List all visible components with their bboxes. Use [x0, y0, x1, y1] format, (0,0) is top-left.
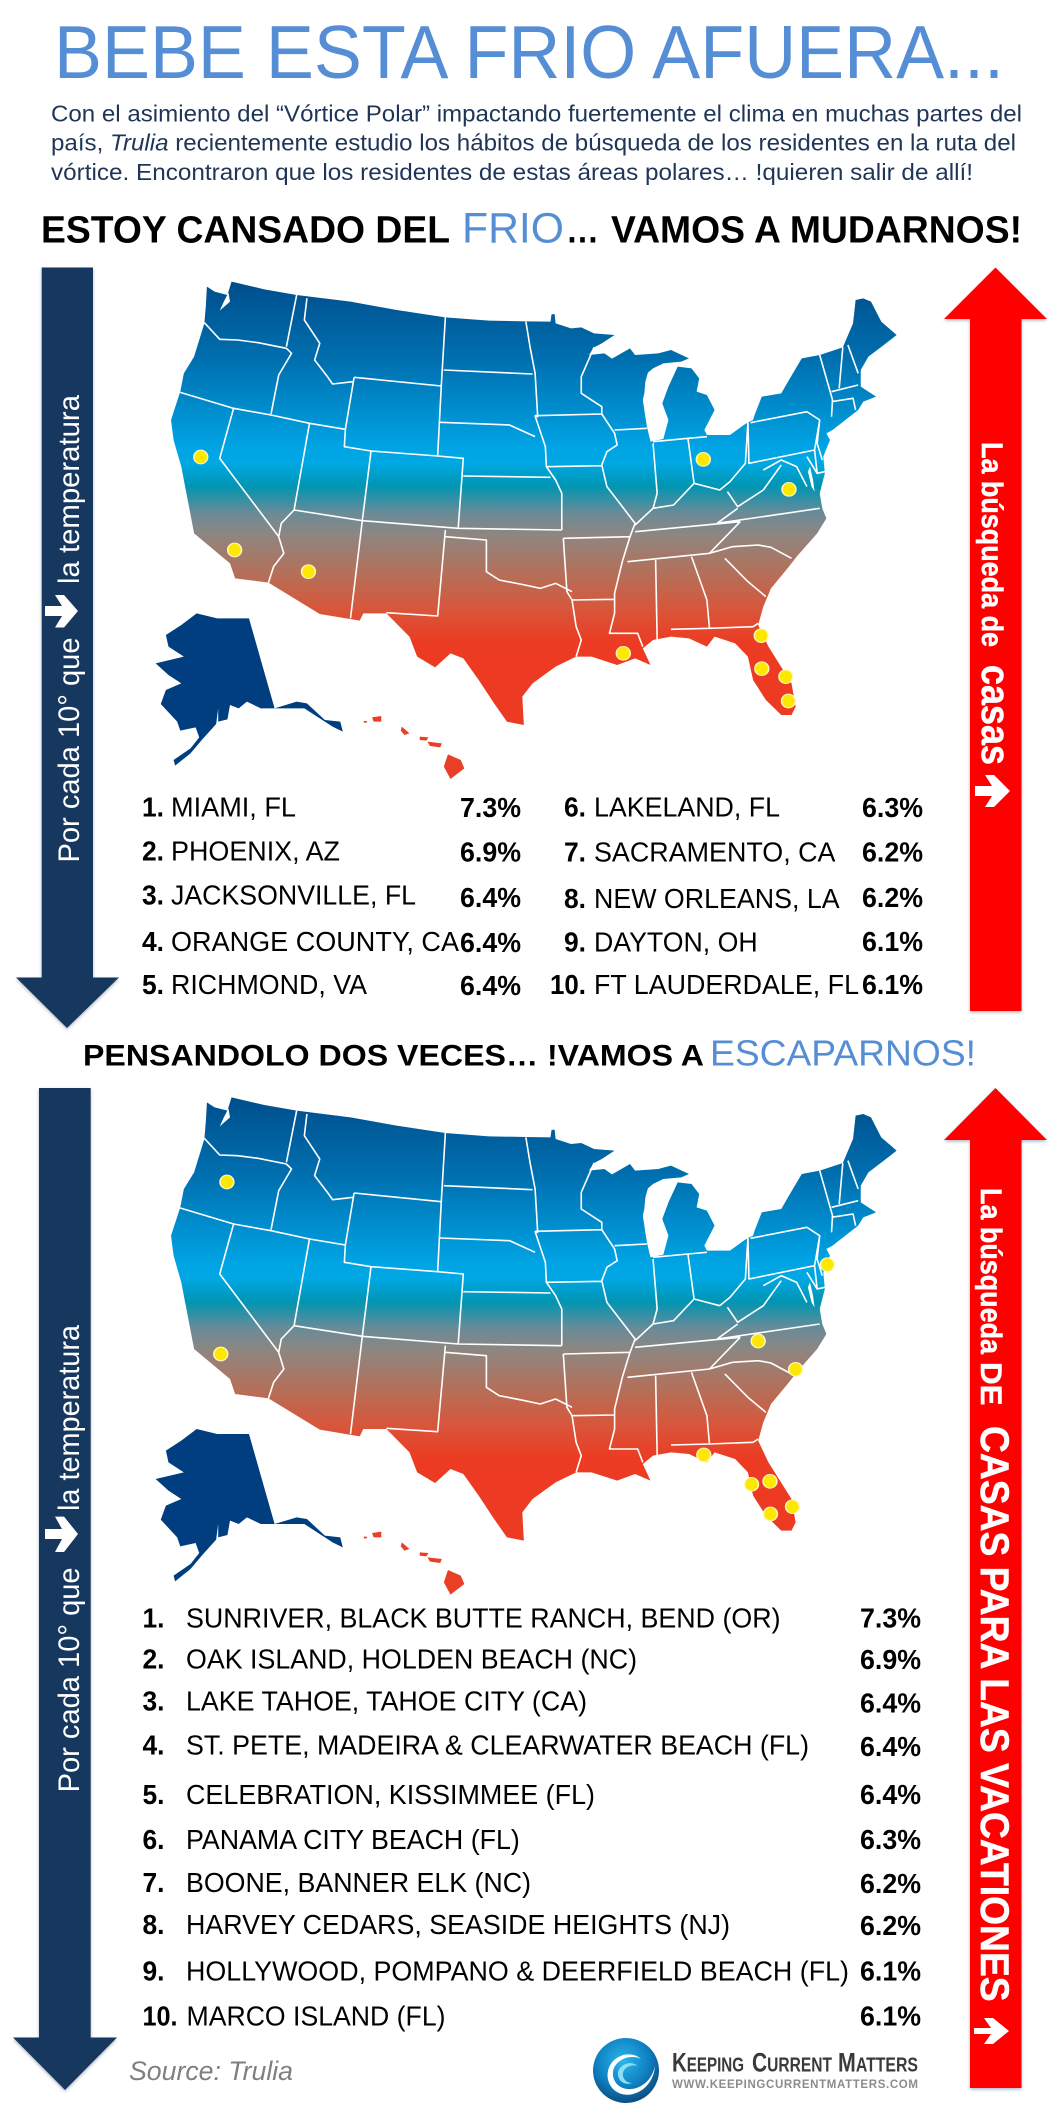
ranking list, section 2: 6.4% — [860, 1688, 921, 1719]
ranking list, section 1: 1. — [142, 792, 164, 823]
arrow: temperature down, section 1: la temperatura — [53, 395, 86, 584]
ranking list, section 1: 9. — [564, 927, 586, 958]
ranking list, section 1: 10. — [550, 969, 586, 1000]
intro paragraph: vórtice. Encontraron que los residentes de estas áreas polares… !quieren salir de allí! — [51, 159, 973, 185]
source note: Source: Trulia — [129, 2056, 293, 2086]
heading: section 2: ESCAPARNOS! — [710, 1033, 976, 1074]
ranking list, section 2: 6.2% — [860, 1910, 921, 1941]
arrow: temperature down, section 1: Por cada 10° que — [53, 638, 86, 862]
heading: section 1: FRIO — [462, 205, 564, 253]
arrow: home searches up, section 1 — [944, 268, 1047, 1011]
ranking list, section 2 — [142, 1602, 921, 2032]
heading: section 2: PENSANDOLO DOS VECES… !VAMOS A — [83, 1040, 704, 1073]
ranking list, section 1: 6.1% — [862, 969, 923, 1000]
ranking list, section 1: 6.9% — [460, 837, 521, 868]
logo wordmark — [672, 2048, 918, 2091]
ranking list, section 1: 4. — [142, 926, 164, 957]
ranking list, section 2: 7.3% — [860, 1602, 921, 1633]
ranking list, section 1: DAYTON, OH — [594, 927, 758, 958]
ranking list, section 2: 8. — [142, 1909, 164, 1940]
ranking list, section 1: NEW ORLEANS, LA — [594, 883, 840, 914]
ranking list, section 1: 6.2% — [862, 882, 923, 913]
ranking list, section 2: BOONE, BANNER ELK (NC) — [186, 1867, 531, 1898]
ranking list, section 1: FT LAUDERDALE, FL — [594, 969, 859, 1000]
city markers, section 2 — [214, 1175, 834, 1521]
heading: section 1: … — [566, 210, 599, 251]
intro paragraph: Con el asimiento del “Vórtice Polar” impactando fuertemente el clima en muchas partes del — [51, 100, 1022, 126]
title: BEBE ESTA FRIO AFUERA... — [54, 10, 1004, 94]
ranking list, section 1: 7. — [564, 836, 586, 868]
heading: section 1: ESTOY CANSADO DEL — [41, 210, 450, 252]
city markers, section 1 — [194, 450, 796, 708]
ranking list, section 1: 6. — [564, 792, 586, 823]
ranking list, section 2: OAK ISLAND, HOLDEN BEACH (NC) — [186, 1643, 637, 1674]
icon: blue swirl — [593, 2038, 659, 2103]
logo: Keeping Current Matters — [593, 2038, 918, 2103]
ranking list, section 2: 3. — [142, 1686, 164, 1717]
ranking list, section 1: SACRAMENTO, CA — [594, 836, 836, 868]
ranking list, section 2: 6.9% — [860, 1644, 921, 1675]
ranking list, section 2: 10. — [142, 2001, 178, 2032]
ranking list, section 2: MARCO ISLAND (FL) — [186, 2001, 446, 2032]
ranking list, section 2: 6.1% — [860, 1956, 921, 1987]
ranking list, section 1: 6.4% — [460, 970, 521, 1001]
heading: section 1: VAMOS A MUDARNOS! — [611, 210, 1022, 252]
ranking list, section 1: JACKSONVILLE, FL — [171, 880, 416, 910]
ranking list, section 1 — [142, 792, 923, 1001]
logo wordmark: KEEPING — [672, 2048, 744, 2078]
ranking list, section 2: CELEBRATION, KISSIMMEE (FL) — [186, 1779, 595, 1810]
ranking list, section 2: HARVEY CEDARS, SEASIDE HEIGHTS (NJ) — [186, 1909, 730, 1940]
ranking list, section 1: 6.3% — [862, 792, 923, 823]
ranking list, section 1: 6.4% — [460, 927, 521, 958]
ranking list, section 2: 6.3% — [860, 1824, 921, 1855]
ranking list, section 2: 1. — [142, 1602, 164, 1633]
ranking list, section 1: 8. — [564, 883, 586, 914]
ranking list, section 1: MIAMI, FL — [171, 792, 296, 823]
intro paragraph: país, Trulia recientemente estudio los hábitos de búsqueda de los residentes en la ruta del — [51, 130, 1016, 156]
ranking list, section 2: 7. — [142, 1867, 164, 1898]
ranking list, section 2: 6. — [142, 1824, 164, 1855]
ranking list, section 1: 6.4% — [460, 882, 521, 913]
arrow: vacation home searches up, section 2: DE — [974, 1362, 1007, 1406]
arrow: temperature down, section 2: Por cada 10° que — [53, 1567, 86, 1792]
ranking list, section 1: 2. — [142, 836, 164, 867]
arrow: vacation home searches up, section 2: CASAS PARA LAS VACATIONES — [972, 1426, 1016, 2002]
ranking list, section 1: ORANGE COUNTY, CA — [171, 926, 459, 957]
ranking list, section 1: 6.2% — [862, 837, 923, 868]
ranking list, section 1: 5. — [142, 969, 164, 1000]
ranking list, section 2: SUNRIVER, BLACK BUTTE RANCH, BEND (OR) — [186, 1602, 781, 1633]
arrow: temperature down, section 1 — [16, 268, 119, 1028]
ranking list, section 2: LAKE TAHOE, TAHOE CITY (CA) — [186, 1686, 587, 1717]
ranking list, section 2: 6.4% — [860, 1731, 921, 1762]
ranking list, section 2: 6.1% — [860, 2001, 921, 2032]
ranking list, section 2: HOLLYWOOD, POMPANO & DEERFIELD BEACH (FL) — [186, 1956, 849, 1987]
ranking list, section 2: 4. — [142, 1729, 164, 1760]
ranking list, section 1: 7.3% — [460, 792, 521, 823]
arrow: temperature down, section 2: la temperatura — [53, 1325, 86, 1511]
arrow: vacation home searches up, section 2: La búsqueda — [974, 1188, 1007, 1354]
ranking list, section 2: 9. — [142, 1956, 164, 1987]
ranking list, section 2: 6.4% — [860, 1779, 921, 1810]
intro paragraph — [51, 100, 1022, 185]
heading: section 2 — [83, 1033, 976, 1074]
ranking list, section 1: 3. — [142, 880, 164, 910]
arrow: temperature down, section 2 — [13, 1088, 117, 2090]
ranking list, section 2: 6.2% — [860, 1868, 921, 1899]
ranking list, section 1: RICHMOND, VA — [171, 969, 367, 1000]
ranking list, section 2: 2. — [142, 1643, 164, 1674]
logo wordmark: MATTERS — [838, 2048, 918, 2078]
arrow: vacation home searches up, section 2 — [944, 1088, 1047, 2088]
ranking list, section 2: ST. PETE, MADEIRA & CLEARWATER BEACH (FL) — [186, 1729, 809, 1760]
arrow: home searches up, section 1: La búsqueda de — [975, 442, 1008, 647]
arrow: home searches up, section 1: casas — [973, 665, 1017, 765]
ranking list, section 1: 6.1% — [862, 926, 923, 957]
ranking list, section 2: PANAMA CITY BEACH (FL) — [186, 1824, 520, 1855]
ranking list, section 1: LAKELAND, FL — [594, 792, 780, 823]
map: United States, section 1 — [156, 282, 897, 779]
logo wordmark: CURRENT — [752, 2048, 832, 2078]
map: United States, section 2 — [156, 1097, 897, 1595]
ranking list, section 1: PHOENIX, AZ — [171, 836, 340, 867]
ranking list, section 2: 5. — [142, 1779, 164, 1810]
heading: section 1 — [41, 205, 1022, 253]
logo wordmark: WWW.KEEPINGCURRENTMATTERS.COM — [672, 2079, 918, 2091]
